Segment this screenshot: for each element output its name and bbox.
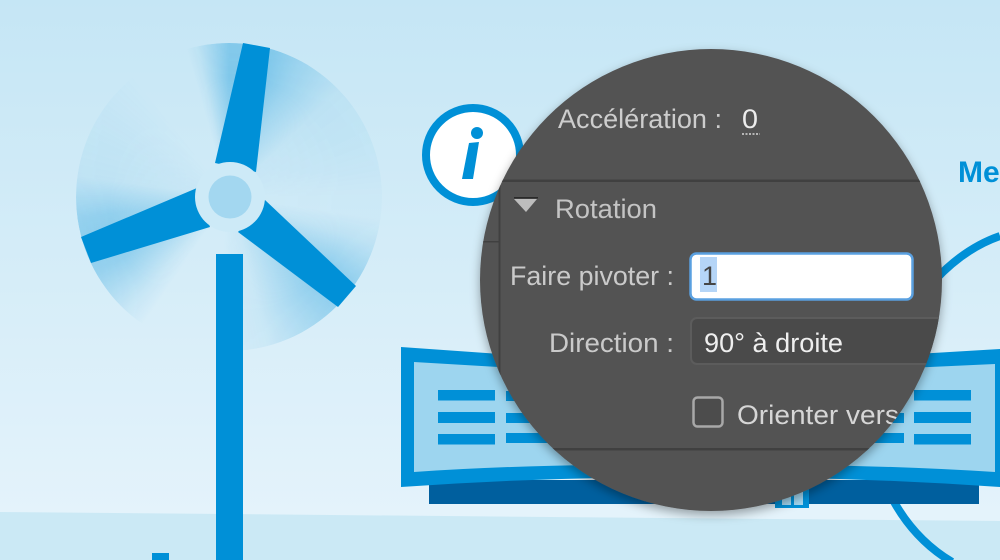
- open book: [401, 347, 1000, 508]
- direction label: Direction :: [549, 328, 674, 358]
- acceleration label: Accélération :: [558, 104, 722, 134]
- book left cover: [401, 347, 600, 487]
- rotate label: Faire pivoter :: [510, 261, 674, 291]
- turbine rotor blur: [76, 43, 382, 351]
- turbine blades: [81, 43, 356, 307]
- book left page: [414, 362, 600, 472]
- acceleration value: [742, 109, 760, 135]
- direction dropdown: [691, 318, 961, 364]
- book right cover: [800, 349, 1000, 487]
- direction dropdown: 90° à droite: [704, 328, 843, 358]
- turbine hub: [195, 162, 265, 232]
- acceleration value: 0: [742, 104, 758, 134]
- book base: [429, 480, 979, 504]
- rotation heading: Rotation: [555, 194, 657, 224]
- circle outline arcs: [893, 236, 1000, 560]
- rotate input: [690, 254, 912, 300]
- heading fragment: Me: [958, 156, 1000, 189]
- turbine tower: [216, 254, 243, 560]
- orient checkbox: [694, 398, 722, 426]
- info icon: [426, 108, 520, 202]
- orient label: Orienter vers l: [737, 400, 913, 430]
- rotate input: 1: [702, 261, 717, 291]
- magnifier lens panel: [480, 49, 961, 511]
- book text lines: [438, 390, 971, 444]
- panel divider lines: [480, 180, 942, 450]
- disclosure triangle: [514, 197, 538, 212]
- book right page: [800, 364, 995, 472]
- book spine: [775, 480, 809, 508]
- ground: [0, 512, 1000, 560]
- small turbine top: [152, 553, 169, 560]
- wind turbine: [81, 43, 356, 560]
